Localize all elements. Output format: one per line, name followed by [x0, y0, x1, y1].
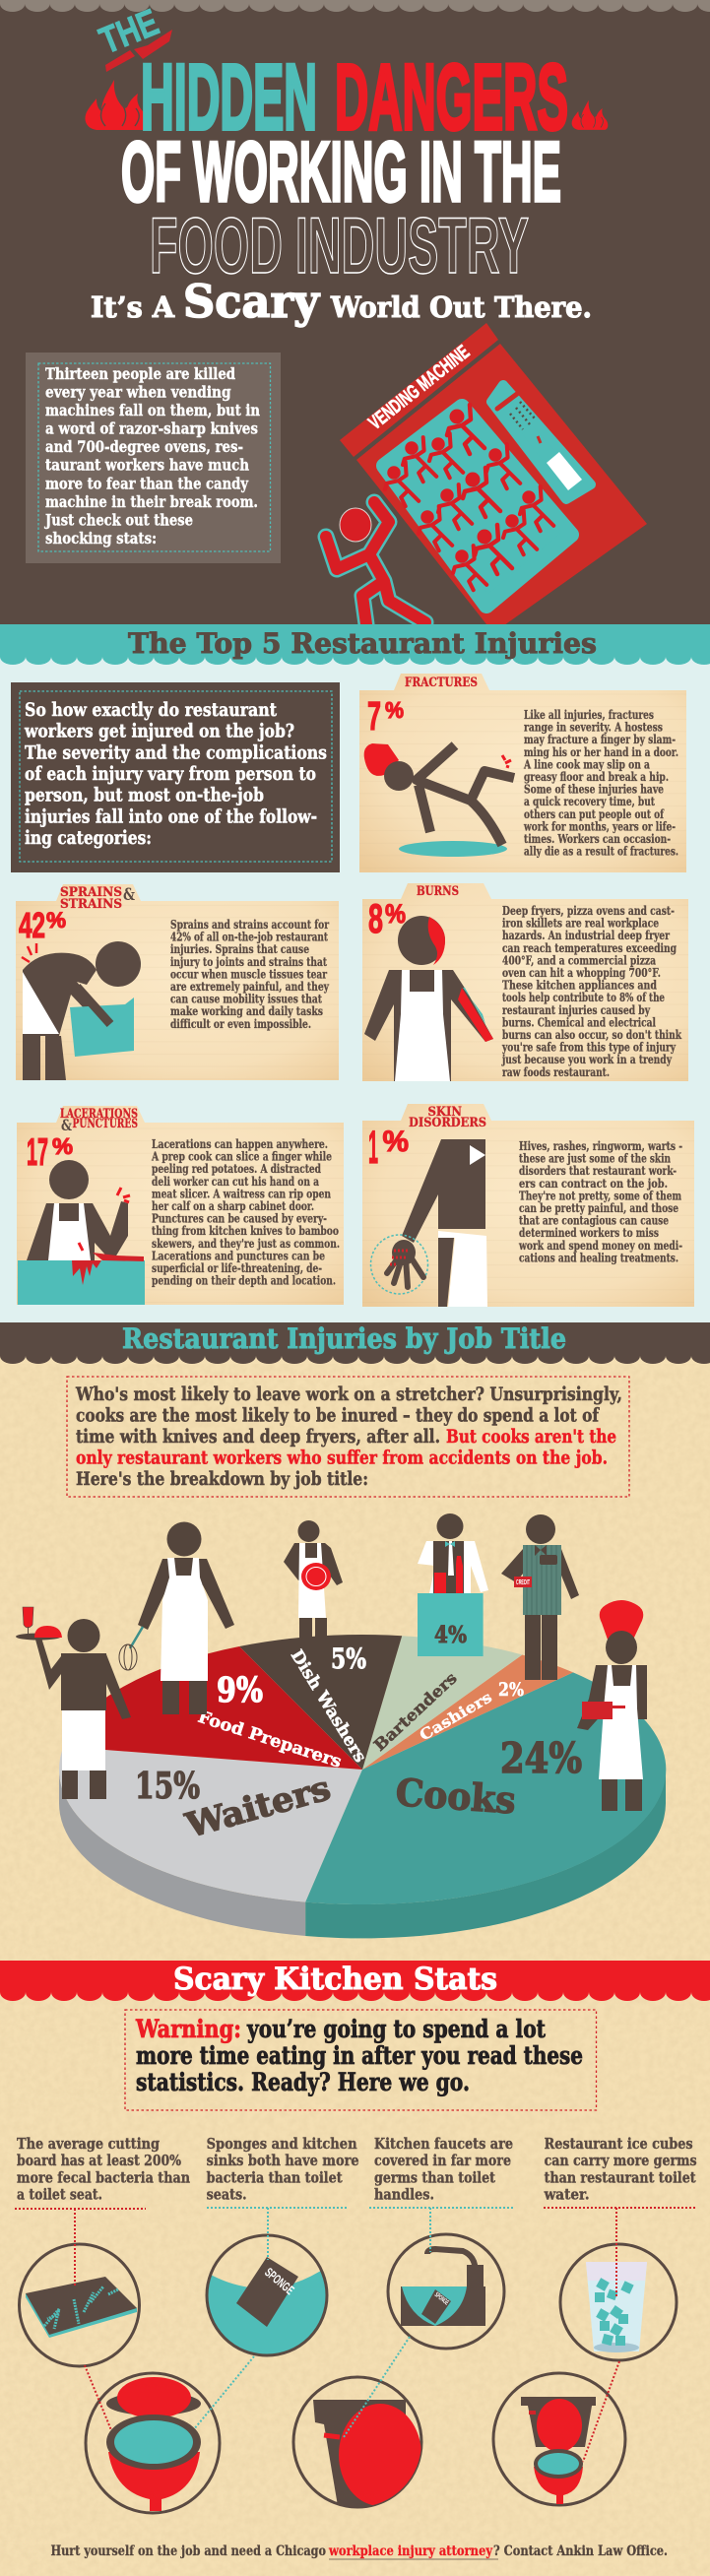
stat: sponge text: [207, 2135, 359, 2204]
connector: ice to toilet: [544, 2208, 696, 2462]
machine control panel: [491, 385, 591, 499]
panel: skin disorders: [362, 1104, 694, 1307]
label: dish washers: Dish Washers: [287, 1646, 370, 1766]
panel: burns: [362, 883, 688, 1081]
figure: cashier: [501, 1514, 579, 1680]
tab title: BURNS: [417, 884, 459, 899]
tab title: &: [123, 885, 136, 905]
label: cashiers: Cashiers: [417, 1688, 495, 1744]
stat: 8%: %: [385, 899, 406, 929]
text block: job title intro: But cooks aren't the: [446, 1426, 616, 1448]
stat: 17%: 17: [27, 1131, 48, 1174]
text: determined workers to miss: [519, 1225, 659, 1240]
slice: cashiers: [362, 1654, 573, 1770]
tab title: STRAINS: [60, 897, 122, 912]
text: occur when muscle tissues tear: [170, 966, 327, 981]
text: meat slicer. A waitress can rip open: [152, 1186, 331, 1200]
stat: faucet text: [374, 2135, 513, 2204]
panel: how injuries happen: [11, 682, 340, 872]
footer: Hurt yourself on the job and need a Chicago: [51, 2544, 326, 2559]
pie chart: [59, 1635, 666, 1938]
label: sponge: SPONGE: [262, 2265, 297, 2297]
section band: scary kitchen stats: [0, 1961, 710, 2001]
intro text panel: taurant workers have much: [45, 456, 249, 475]
stat: 7%: 7: [367, 693, 381, 739]
connector: faucet to toilet: [344, 2208, 515, 2437]
label: waiters: Waiters: [181, 1769, 335, 1846]
tab title: PUNCTURES: [73, 1117, 138, 1131]
stat: 7%: %: [385, 697, 404, 723]
text: Lacerations and punctures can be: [152, 1248, 325, 1262]
text: Punctures can be caused by every-: [152, 1211, 327, 1226]
stat: 42%: 42: [19, 905, 45, 945]
panel: fractures: [359, 674, 686, 872]
intro text panel: more to fear than the candy: [45, 474, 249, 492]
icon: ice water glass: [560, 2244, 677, 2360]
machine window: [384, 407, 571, 606]
text: thing from kitchen knives to bamboo: [152, 1223, 339, 1238]
text: ers can contract on the job.: [519, 1176, 668, 1191]
stat: cutting board text: more fecal bacteria than: [17, 2168, 190, 2186]
stat: cutting board text: [17, 2135, 190, 2204]
connector: cutting board to toilet: [15, 2209, 146, 2430]
rash hand: [370, 1235, 427, 1294]
footer: workplace injury attorney: [328, 2544, 493, 2559]
tab title: [60, 1107, 138, 1134]
icon: toilet full: [493, 2373, 625, 2505]
tab title: [60, 885, 136, 912]
icon: right flame: [572, 100, 608, 130]
text: 400°F, and a commercial pizza: [502, 952, 656, 967]
label: 2%: 2%: [498, 1679, 524, 1701]
callout: warning: [125, 2010, 597, 2110]
stat: ice cube text: water.: [544, 2186, 590, 2204]
text: A line cook may slip on a: [523, 756, 650, 771]
subtitle: It’s A: [91, 290, 174, 324]
panel: how injuries happen: of each injury vary from person to: [25, 763, 316, 785]
text: deli worker can cut his hand on a: [152, 1174, 319, 1189]
pie side: cooks: [305, 1770, 666, 1938]
footer: [51, 2544, 668, 2559]
text: [518, 1138, 682, 1264]
title: [85, 2, 608, 328]
subtitle: World Out There.: [330, 290, 592, 324]
text: raw foods restaurant.: [502, 1064, 610, 1079]
panel: how injuries happen: ing categories:: [25, 827, 152, 849]
text block: job title intro: time with knives and deep fryers, after all.: [76, 1426, 440, 1448]
stat: cutting board text: The average cutting: [17, 2135, 160, 2153]
text: Some of these injuries have: [524, 782, 664, 797]
section band: top 5 injuries: [0, 624, 710, 665]
intro text panel: machines fall on them, but in: [45, 401, 260, 419]
label: 9%: 9%: [217, 1670, 263, 1710]
panel: sprains and strains: [16, 884, 339, 1080]
slice: waiters: [59, 1747, 362, 1902]
stat: 1%: [368, 1121, 409, 1173]
text: injuries. Sprains that cause: [170, 941, 309, 956]
panel: how injuries happen: person, but most on-the-job: [25, 785, 264, 806]
icon: burned worker: [364, 916, 493, 1081]
text: pending on their depth and location.: [152, 1273, 336, 1288]
tab title: SKIN: [427, 1105, 462, 1120]
callout: warning: statistics. Ready? Here we go.: [136, 2068, 470, 2096]
icon: worker with rash: [370, 1139, 487, 1307]
icon: faucet and sink: [388, 2234, 504, 2349]
stat: 1%: %: [382, 1126, 409, 1158]
connector: sponge to toilet: [194, 2208, 348, 2429]
text: [170, 917, 330, 1031]
heading: the top 5 restaurant injuries: The Top 5 Restaurant Injuries: [128, 627, 597, 660]
figure: bartender: [418, 1513, 488, 1656]
label: 15%: 15%: [135, 1766, 200, 1807]
stat: cutting board text: a toilet seat.: [17, 2186, 102, 2204]
light section background: [0, 650, 710, 1322]
text: a quick recovery time, but: [524, 794, 655, 808]
icon: knife: [105, 30, 172, 72]
figure: cook: [577, 1600, 647, 1811]
teal block with 4%: [418, 1593, 484, 1656]
tab title: FRACTURES: [405, 676, 478, 690]
panel: how injuries happen: The severity and the complications: [25, 741, 327, 763]
intro text panel: a word of razor-sharp knives: [45, 419, 258, 438]
machine label: VENDING MACHINE: [364, 342, 474, 434]
intro text panel: and 700-degree ovens, res-: [45, 437, 243, 456]
stat: 42%: %: [46, 908, 66, 933]
callout: warning: more time eating in after you read these: [136, 2041, 583, 2070]
stat: 1%: 1: [368, 1121, 378, 1173]
text block: job title intro: [67, 1377, 629, 1497]
callout: warning: you’re going to spend a lot: [246, 2015, 546, 2043]
text: injury to joints and strains that: [170, 954, 327, 969]
footer: ? Contact Ankin Law Office.: [493, 2544, 668, 2559]
large red figure: [326, 502, 425, 624]
text: A prep cook can slice a finger while: [151, 1149, 332, 1164]
teal block with 4%: 4%: [434, 1622, 467, 1648]
stat: 7%: [367, 693, 404, 739]
stat: faucet text: germs than toilet: [374, 2168, 495, 2186]
stat: 8%: [368, 895, 406, 941]
text: Sprains and strains account for: [170, 917, 329, 932]
stat: sponge text: bacteria than toilet: [207, 2168, 343, 2186]
callout: warning: Warning:: [135, 2015, 241, 2043]
tab title: DISORDERS: [409, 1116, 486, 1130]
panel: lacerations and punctures: [17, 1106, 344, 1305]
section band: injuries by job title: [0, 1322, 710, 1364]
text block: job title intro: Here's the breakdown by job title:: [76, 1468, 368, 1490]
text: [151, 1136, 340, 1288]
header panel: [0, 0, 710, 630]
figure: waiter: [16, 1607, 131, 1799]
pie side: waiters: [59, 1770, 305, 1936]
subtitle: Scary: [183, 275, 320, 328]
credit card: [514, 1577, 532, 1587]
tab title: LACERATIONS: [60, 1107, 138, 1122]
panel: how injuries happen: So how exactly do restaurant: [25, 699, 277, 721]
text block: job title intro: only restaurant workers who suffer from accidents on the job.: [76, 1448, 608, 1469]
subtitle: [91, 275, 592, 328]
stat: sponge text: sinks both have more: [207, 2152, 359, 2169]
slice: bartenders: [362, 1636, 522, 1770]
credit card: CREDIT: [516, 1579, 530, 1586]
icon: toilet side: [293, 2377, 421, 2507]
icon: left flame: [85, 80, 148, 130]
machine body: [356, 344, 647, 630]
text: range in severity. A hostess: [524, 720, 663, 735]
tab title: SPRAINS: [60, 885, 122, 900]
intro text panel: Just check out these: [43, 510, 193, 529]
stat: sponge text: seats.: [207, 2186, 247, 2204]
icon: cut worker: [18, 1160, 145, 1305]
intro text panel: Thirteen people are killed: [45, 364, 235, 383]
text: her calf on a sharp cabinet door.: [152, 1198, 314, 1213]
stat: 17%: %: [52, 1133, 73, 1159]
icon: toilet bowl front: [86, 2373, 220, 2513]
slice: food preparers: [63, 1646, 362, 1770]
heading: Scary Kitchen Stats: [173, 1962, 497, 1997]
panel: how injuries happen: workers get injured on the job?: [24, 721, 294, 742]
icon: cutting board: [20, 2244, 140, 2366]
stat: faucet text: handles.: [374, 2186, 434, 2204]
panel: how injuries happen: injuries fall into one of the follow-: [25, 805, 317, 827]
text: 42% of all on-the-job restaurant: [170, 930, 328, 944]
little trapped figures: [385, 405, 553, 590]
stat: faucet text: covered in far more: [374, 2152, 511, 2169]
icon: slipping cook: [364, 743, 514, 857]
label: 24%: 24%: [500, 1734, 582, 1782]
text block: job title intro: cooks are the most likely to be inured – they do spend a lot of: [76, 1404, 600, 1426]
text: restaurant injuries caused by: [502, 1002, 651, 1017]
illustration: falling vending machine: [326, 323, 647, 630]
text: These kitchen appliances and: [502, 978, 657, 993]
text: superficial or life-threatening, de-: [152, 1260, 322, 1275]
intro text panel: [26, 353, 281, 563]
intro text panel: every year when vending: [45, 382, 230, 402]
text: are extremely painful, and they: [170, 979, 330, 994]
icon: sponge in sink: [202, 2235, 330, 2363]
machine header band: [340, 323, 498, 457]
slice: dish washers: [239, 1635, 402, 1770]
label: bartenders: Bartenders: [370, 1668, 461, 1755]
figure: dish washer: [284, 1520, 343, 1638]
intro text panel: shocking stats:: [45, 529, 157, 547]
text: Like all injuries, fractures: [524, 707, 654, 722]
slice: cooks: [305, 1672, 666, 1904]
stat: faucet text: Kitchen faucets are: [374, 2135, 513, 2153]
title: HIDDEN: [141, 45, 317, 150]
text: Lacerations can happen anywhere.: [152, 1136, 328, 1151]
intro text panel: machine in their break room.: [45, 492, 258, 511]
text: can cause mobility issues that: [170, 992, 322, 1006]
label: 5%: 5%: [331, 1642, 366, 1675]
text: [501, 903, 681, 1079]
stat: sponge text: Sponges and kitchen: [207, 2135, 357, 2153]
text: difficult or even impossible.: [170, 1016, 311, 1031]
label: small sponge: SPONGE: [433, 2291, 450, 2307]
figure: food preparer: [119, 1522, 234, 1714]
label: food preparers: Food Preparers: [195, 1707, 344, 1772]
icon: worker lifting box: [22, 941, 141, 1080]
text: burns. Chemical and electrical: [502, 1014, 656, 1029]
stat: 8%: 8: [368, 895, 383, 941]
stat: cutting board text: board has at least 200%: [17, 2152, 181, 2169]
text: make working and daily tasks: [170, 1003, 323, 1018]
tab title: &: [61, 1116, 72, 1134]
heading: Restaurant Injuries by Job Title: [122, 1322, 566, 1355]
text: skewers, and they're just as common.: [152, 1236, 340, 1251]
label: cooks: Cooks: [394, 1770, 517, 1822]
stat: ice cube text: [544, 2135, 697, 2204]
tab title: [409, 1105, 486, 1130]
text: [523, 707, 678, 859]
text: peeling red potatoes. A distracted: [152, 1161, 321, 1176]
